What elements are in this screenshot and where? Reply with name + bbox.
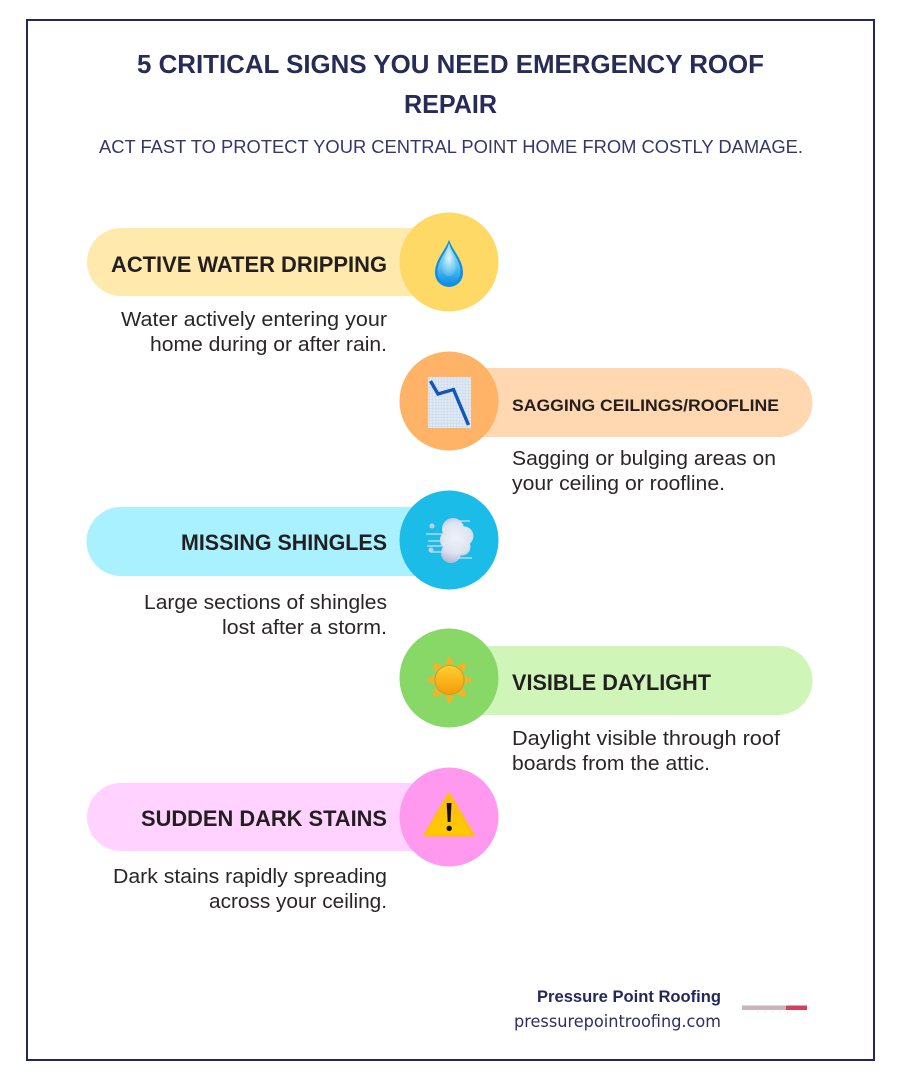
footer brand text [514,988,721,1032]
title [137,49,764,119]
description 4: Daylight visible through roof [512,728,780,750]
heading 2: SAGGING CEILINGS/ROOFLINE [512,396,779,415]
description 2: your ceiling or roofline. [512,473,725,495]
title: 5 CRITICAL SIGNS YOU NEED EMERGENCY ROOF [137,49,764,79]
description 1: home during or after rain. [150,334,387,356]
label pill 1 [87,228,450,296]
sign 4: visible daylight [400,628,813,775]
description 3: lost after a storm. [222,617,387,639]
icon circle 5 [400,768,498,866]
description 3: Large sections of shingles [144,592,387,614]
description 1 [121,309,387,356]
description 4: boards from the attic. [512,753,710,775]
icon: wind cloud [426,518,474,563]
label pill 4 [450,646,813,715]
icon: falling chart [428,377,471,428]
label pill 5 [87,783,450,851]
description 4 [512,728,780,775]
icon: sun [426,656,473,704]
subtitle: ACT FAST TO PROTECT YOUR CENTRAL POINT HOME FROM COSTLY DAMAGE. [99,137,803,157]
icon: water drop [435,240,463,287]
heading 1: ACTIVE WATER DRIPPING [111,252,387,277]
footer brand text: Pressure Point Roofing [537,988,721,1006]
description 5 [113,866,387,913]
icon circle 3 [400,490,498,590]
description 5: across your ceiling. [209,891,387,913]
icon circle 4 [400,628,498,728]
description 5: Dark stains rapidly spreading [113,866,387,888]
description 3 [144,592,387,639]
sign 5: sudden dark stains [87,768,498,913]
sign 2: sagging ceilings [400,352,813,495]
heading 5: SUDDEN DARK STAINS [141,806,387,831]
description 2 [512,448,776,495]
heading 3: MISSING SHINGLES [181,530,387,555]
title: REPAIR [404,89,497,119]
sign 1: active water dripping [87,212,499,356]
icon circle 2 [400,352,498,450]
icon: warning triangle [425,794,473,835]
label pill 3 [87,507,450,576]
footer logo [742,1006,807,1012]
sign 3: missing shingles [87,490,499,639]
description 1: Water actively entering your [121,309,387,331]
icon circle 1 [400,212,498,312]
heading 4: VISIBLE DAYLIGHT [512,670,712,695]
footer brand text: pressurepointroofing.com [514,1012,721,1032]
description 2: Sagging or bulging areas on [512,448,776,470]
label pill 2 [450,368,813,437]
